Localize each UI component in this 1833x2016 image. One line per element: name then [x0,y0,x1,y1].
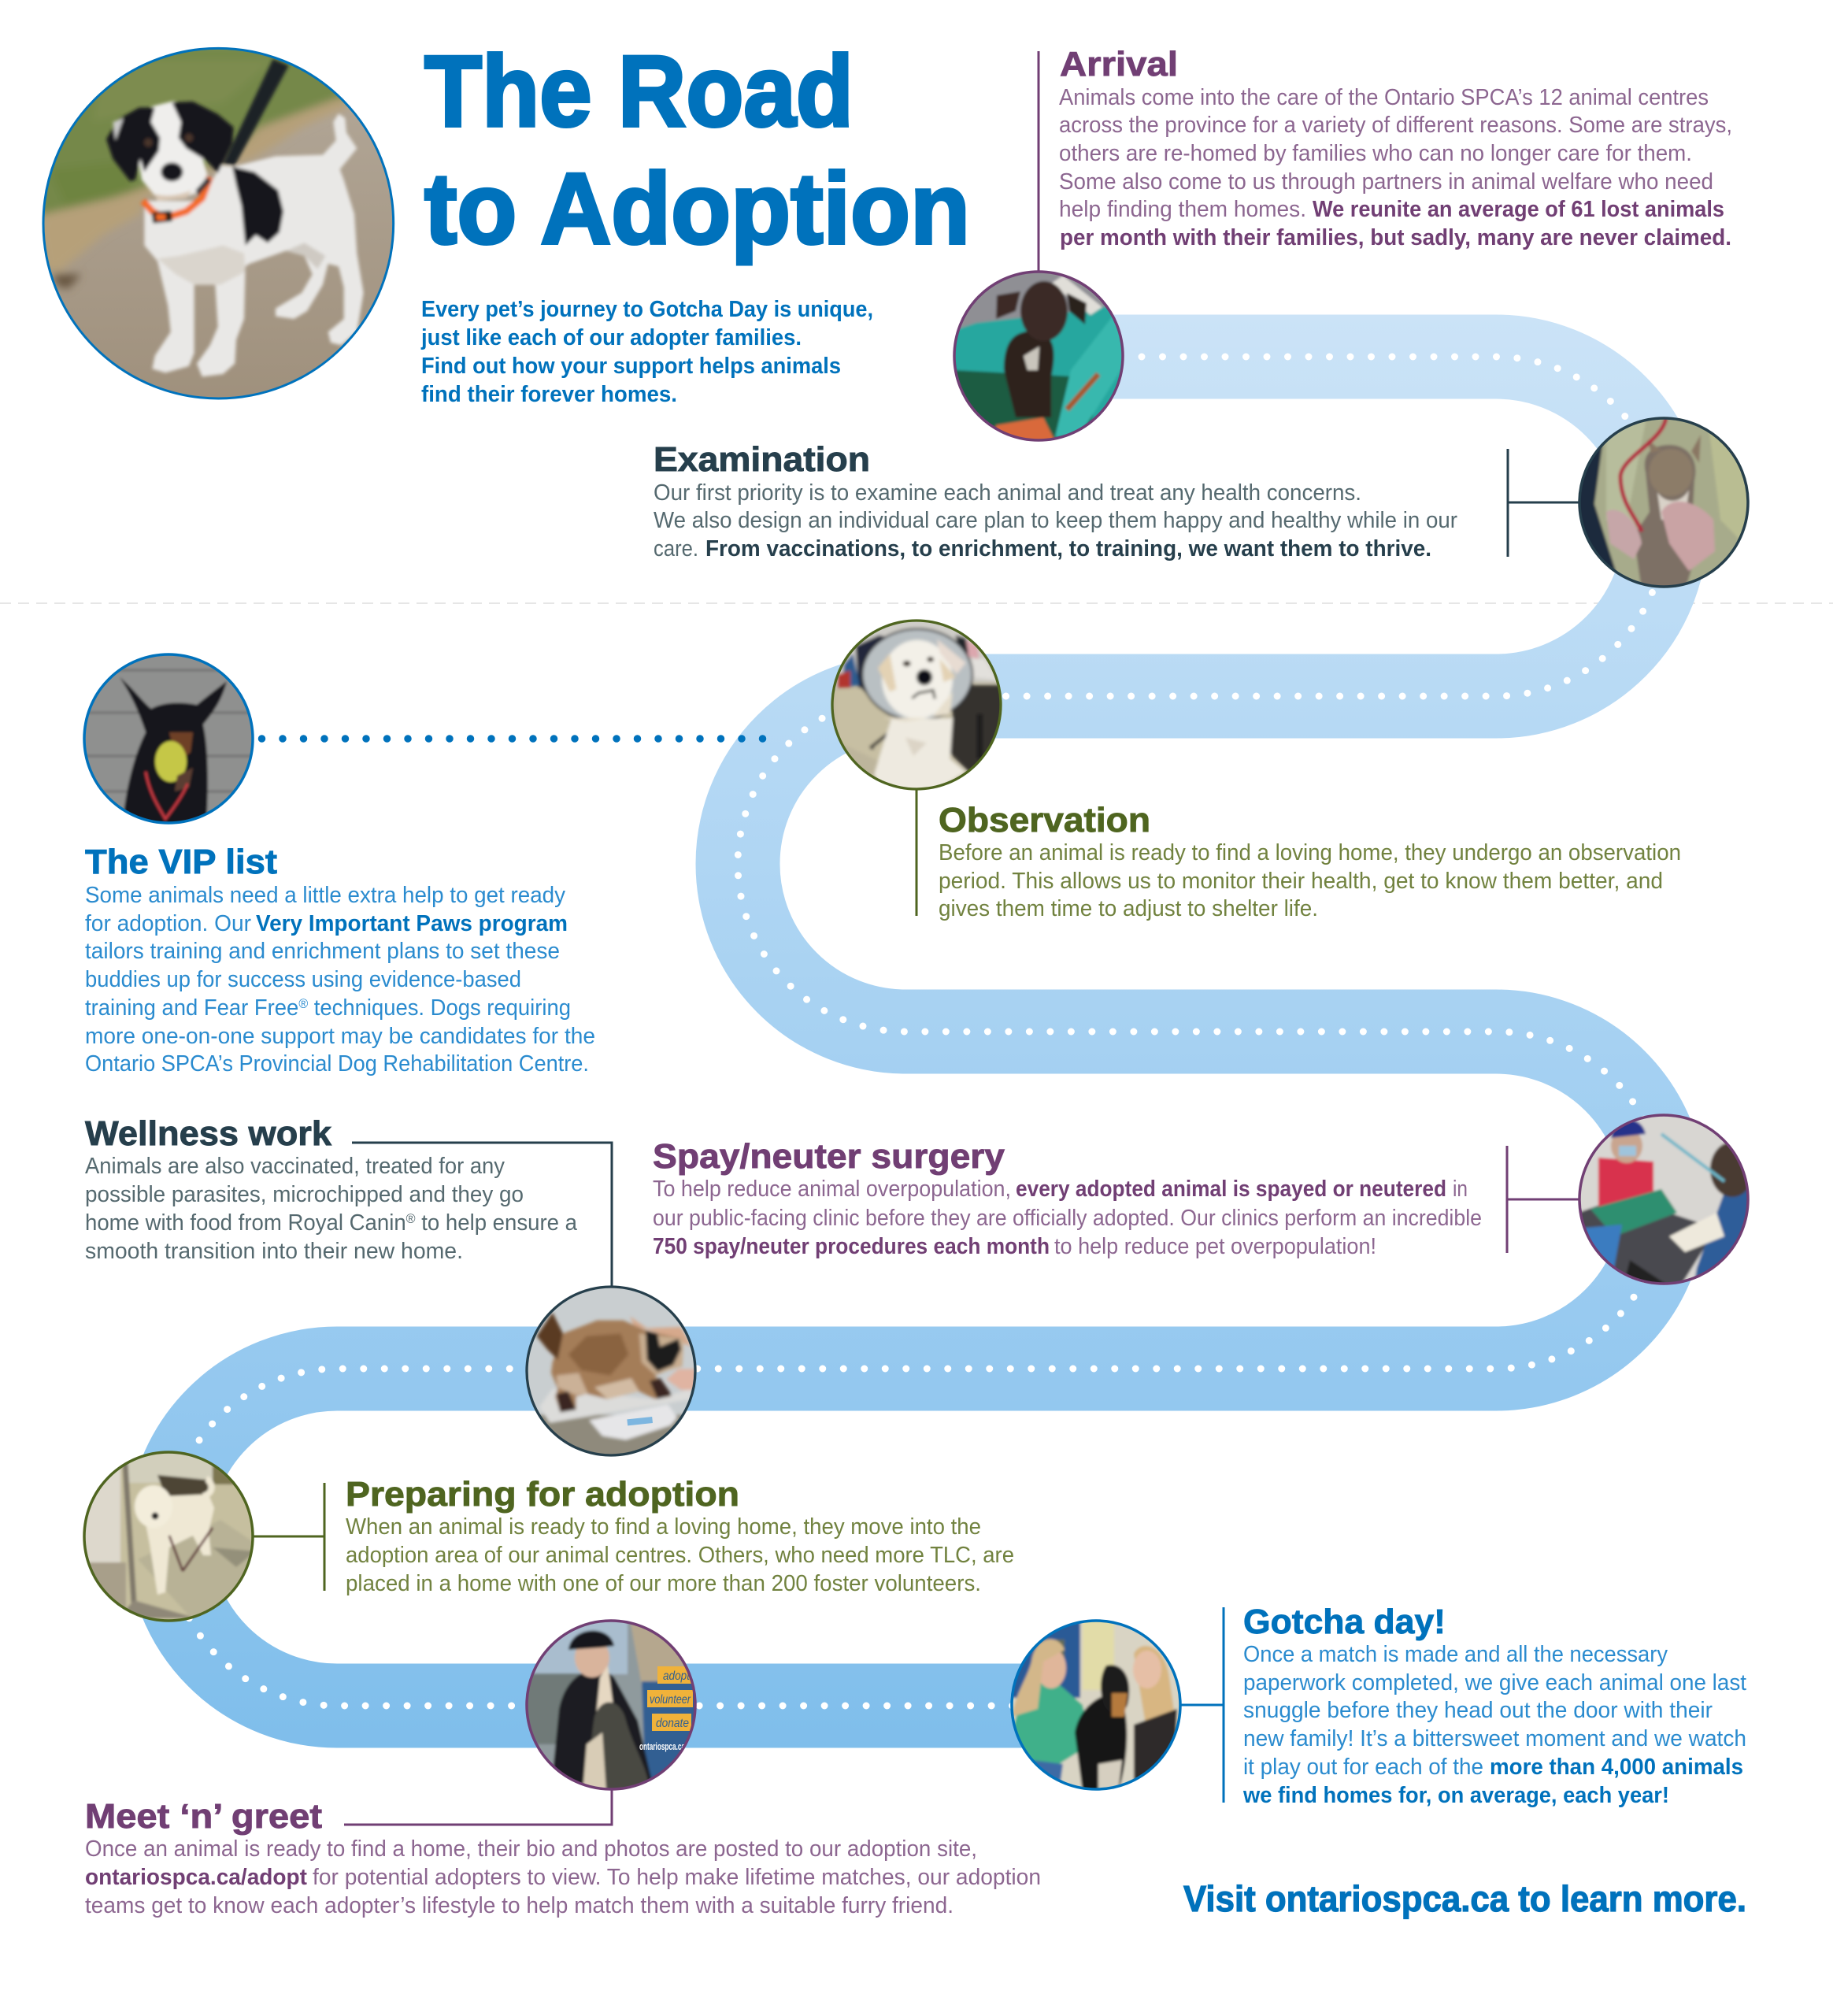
body: vip: Ontario SPCA’s Provincial Dog Rehabilitation Centre. [85,1051,589,1077]
intro text: Every pet’s journey to Gotcha Day is unique, [421,297,873,322]
vip dotted connector [261,735,764,743]
photo: volunteer hugging a dog [525,1619,698,1792]
connector: spay/neuter [1507,1146,1579,1253]
body: examination: Our first priority is to examine each animal and treat any health concerns. [654,480,1361,506]
body: vip: more one-on-one support may be candidates for the [85,1024,595,1049]
body: observation: gives them time to adjust to shelter life. [939,896,1318,921]
photo: cat on a scale [524,1284,702,1462]
body: examination: We also design an individual care plan to keep them happy and healthy while in our [654,508,1457,533]
body: arrival: help finding them homes. [1059,197,1306,222]
body: examination: care. [654,536,698,561]
body: arrival: Some also come to us through partners in animal welfare who need [1059,169,1713,195]
photo: white dog in cone [831,619,1002,791]
photo: volunteer hugging a dog: adopt [663,1670,690,1683]
body: arrival: across the province for a variety of different reasons. Some are strays, [1059,113,1732,138]
body: vip: buddies up for success using evidence-based [85,967,521,992]
connector: examination [1508,449,1579,557]
photo: volunteer hugging a dog: ontariospca.ca [639,1740,685,1752]
body: gotcha: paperwork completed, we give each animal one last [1243,1670,1746,1695]
body: vip: Very Important Paws program [256,911,568,936]
body: meet: teams get to know each adopter’s lifestyle to help match them with a suitable furry friend. [85,1893,954,1918]
body: meet [85,1836,1041,1918]
heading: vip: The VIP list [85,843,277,881]
body: wellness: smooth transition into their new home. [85,1239,463,1264]
body: spay/neuter [653,1177,1482,1259]
body: spay/neuter: every adopted animal is spayed or neutered [1016,1177,1446,1202]
title: The Road [424,35,854,148]
body: gotcha: we find homes for, on average, each year! [1242,1783,1669,1808]
body: arrival: We reunite an average of 61 lost animals [1313,197,1724,222]
photo: surgery team [1578,1114,1754,1292]
photo: volunteer hugging a dog: volunteer [650,1693,691,1707]
intro text: Find out how your support helps animals [421,354,841,379]
panel: observation [827,614,1681,921]
body: spay/neuter: to help reduce pet overpopulation! [1054,1234,1376,1259]
body: spay/neuter: To help reduce animal overpopulation, [653,1177,1011,1202]
body: arrival: per month with their families, but sadly, many are never claimed. [1060,225,1731,250]
body: wellness: to help ensure a [416,1210,578,1236]
heading: observation: Observation [939,801,1150,839]
body: examination [654,480,1457,561]
heading: wellness: Wellness work [85,1114,332,1153]
body: vip: tailors training and enrichment plans to set these [85,939,560,964]
body: spay/neuter: our public-facing clinic before they are officially adopted. Our clinics perform an incredible [653,1206,1482,1231]
heading: gotcha: Gotcha day! [1243,1603,1446,1641]
body: preparing: placed in a home with one of our more than 200 foster volunteers. [346,1571,981,1596]
body: gotcha: it play out for each of the [1243,1755,1483,1780]
connector: gotcha [1180,1607,1224,1803]
body: vip: techniques. Dogs requiring [308,995,571,1021]
body: gotcha: Once a match is made and all the necessary [1243,1642,1668,1667]
body: arrival: others are re-homed by families who can no longer care for them. [1059,141,1692,166]
panel: wellness work [85,1114,702,1462]
body: meet: ontariospca.ca/adopt [85,1865,307,1890]
connector: preparing [253,1483,324,1591]
body: meet: Once an animal is ready to find a home, their bio and photos are posted to our adoption site, [85,1836,977,1862]
photo: volunteer hugging a dog: donate [656,1717,689,1730]
body: meet: for potential adopters to view. To help make lifetime matches, our adoption [313,1865,1041,1890]
body: wellness: Animals are also vaccinated, treated for any [85,1154,505,1179]
body: preparing: adoption area of our animal centres. Others, who need more TLC, are [346,1543,1014,1568]
body: vip: training and Fear Free [85,995,311,1021]
body: arrival: Animals come into the care of the Ontario SPCA’s 12 animal centres [1059,85,1709,110]
body: gotcha: new family! It’s a bittersweet moment and we watch [1243,1726,1746,1751]
body: gotcha: snuggle before they head out the door with their [1243,1698,1713,1723]
title [424,35,970,265]
panel: gotcha day [1009,1603,1746,1808]
photo: doberman with tennis ball [83,653,256,826]
body: spay/neuter: in [1453,1177,1468,1202]
call to action: Visit ontariospca.ca to learn more. [1183,1878,1746,1919]
body: wellness: possible parasites, microchipped and they go [85,1182,524,1207]
winding road [168,357,1665,1706]
body: vip: Some animals need a little extra help to get ready [85,883,565,908]
panel: examination [654,417,1751,591]
body: observation: period. This allows us to monitor their health, get to know them better, and [939,869,1663,894]
connector: meet [344,1789,612,1825]
panel: preparing for adoption [83,1451,1014,1625]
body: examination: From vaccinations, to enrichment, to training, we want them to thrive. [705,536,1431,561]
connector: arrival [1038,51,1039,272]
connector: observation [915,790,918,916]
intro text: just like each of our adopter families. [420,325,802,350]
body: wellness: ® [406,1211,416,1226]
intro text [420,297,873,407]
panel: vip list [83,653,595,1077]
photo: cat with stethoscope [1578,417,1751,591]
photo: two women with adopted dog [1009,1619,1183,1792]
body: preparing: When an animal is ready to find a loving home, they move into the [346,1514,981,1540]
heading: preparing: Preparing for adoption [346,1475,739,1514]
title: to Adoption [424,153,970,265]
heading: arrival: Arrival [1060,45,1178,83]
panel: meet 'n' greet [85,1619,1041,1918]
intro text: find their forever homes. [421,382,677,407]
photo: puppy in teal bed [953,271,1126,441]
body: vip [85,883,595,1077]
heading: examination: Examination [654,440,870,479]
hero photo: puppy on a leash [39,43,402,406]
body: observation: Before an animal is ready to find a loving home, they undergo an observation [939,840,1681,865]
heading: spay/neuter: Spay/neuter surgery [653,1137,1005,1176]
body: wellness: home with food from Royal Canin [85,1210,423,1236]
body: wellness [85,1154,578,1264]
body: gotcha [1242,1642,1746,1808]
heading: meet: Meet ‘n’ greet [85,1797,322,1836]
body: spay/neuter: 750 spay/neuter procedures each month [653,1234,1050,1259]
body: preparing [346,1514,1014,1596]
body: gotcha: more than 4,000 animals [1490,1755,1743,1780]
connector: wellness [352,1143,612,1288]
panel: spay/neuter surgery [653,1114,1754,1292]
body: vip: for adoption. Our [85,911,251,936]
body: vip: ® [298,996,309,1011]
photo: white dog in adoption kennel [83,1451,256,1625]
body: arrival [1059,85,1732,250]
body: observation [939,840,1681,921]
panel: arrival [953,45,1732,441]
